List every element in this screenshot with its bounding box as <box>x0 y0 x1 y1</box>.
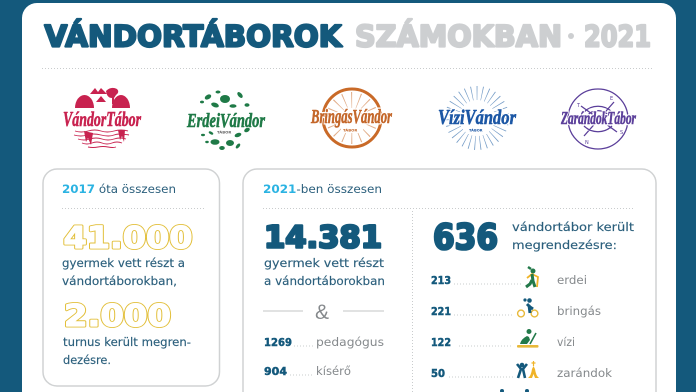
row: bike: bringás <box>557 304 601 318</box>
row: escorts: 904 <box>264 366 287 378</box>
row: bike: 221 <box>431 306 451 318</box>
icon: cyclist <box>518 298 538 317</box>
row: teachers <box>264 335 384 349</box>
logo: ZarándokTábor: ZarándokTábor <box>560 108 637 128</box>
row: pilgrim: zarándok <box>557 366 612 380</box>
text: children 2021: gyermek vett részt <box>264 256 385 270</box>
big number 14.381: 14.381 <box>264 220 382 256</box>
text: turns: turnus került megren- <box>63 335 191 349</box>
reeds <box>84 130 125 145</box>
icon: pilgrim and church <box>517 361 539 378</box>
row: teachers: 1269 <box>264 337 292 349</box>
logo: ZarándokTábor: S <box>620 130 623 136</box>
panel: 2021 total: megrendezésre: <box>512 238 617 252</box>
text: camps held: vándortábor került <box>512 220 635 234</box>
waves <box>74 130 129 148</box>
tree <box>106 88 118 104</box>
row: water <box>431 329 575 349</box>
logo: ErdeiVándor: TÁBOR <box>217 130 231 134</box>
row: forest: erdei <box>557 273 587 287</box>
row: pilgrim <box>431 361 612 380</box>
icon: hiker <box>526 267 538 287</box>
mountains <box>90 88 107 102</box>
panel: 2021 total <box>243 169 656 392</box>
panel heading 2017: 2017 óta összesen <box>62 182 176 196</box>
row: water: vízi <box>557 335 575 349</box>
ampersand divider <box>263 301 384 324</box>
row: escorts <box>264 364 351 378</box>
logo: ErdeiVándor <box>186 90 265 150</box>
partial next row icons <box>500 389 529 392</box>
logo: VíziVándor <box>438 93 517 143</box>
row: teachers: pedagógus <box>316 335 384 349</box>
left tent <box>75 95 94 108</box>
ampersand divider: & <box>315 301 329 324</box>
right tent <box>112 95 130 108</box>
logo: BringásVándor: TÁBOR <box>343 128 357 132</box>
panel: since 2017 <box>43 169 220 386</box>
title: 2021 <box>584 20 651 54</box>
title <box>44 20 651 54</box>
title: VÁNDORTÁBOROK <box>44 20 343 54</box>
logo: BringásVándor <box>310 89 392 147</box>
row: forest: 213 <box>431 275 451 287</box>
row: escorts: kísérő <box>316 364 351 378</box>
row: pilgrim: 50 <box>431 368 445 380</box>
panel: since 2017: dezésre. <box>63 353 111 367</box>
panel: since 2017: vándortáborokban, <box>62 274 177 288</box>
title: SZÁMOKBAN <box>355 20 562 54</box>
row: bike <box>431 298 601 318</box>
logo: VándorTábor: VándorTábor <box>63 107 142 131</box>
icon: rower <box>517 329 538 348</box>
logo: VándorTábor <box>63 88 142 148</box>
logo: ZarándokTábor <box>560 89 637 149</box>
logo: ZarándokTábor: N <box>585 140 589 146</box>
logo: ZarándokTábor: ZarándokTábor <box>560 108 637 128</box>
logos row <box>63 88 637 150</box>
logo: VíziVándor: VíziVándor <box>438 105 517 129</box>
row: water: 122 <box>431 337 451 349</box>
big number 2.000: 2.000 <box>64 299 171 334</box>
logo: VíziVándor: TÁBOR <box>469 128 483 132</box>
logo: BringásVándor: BringásVándor <box>310 106 392 128</box>
big number 41.000: 41.000 <box>64 221 192 256</box>
panel: 2021 total: a vándortáborokban <box>264 274 385 288</box>
logo: ZarándokTábor: E <box>610 96 613 102</box>
logo: BringásVándor: BringásVándor <box>310 106 392 128</box>
logo: VíziVándor: VíziVándor <box>438 105 517 129</box>
panel heading 2021: 2021-ben összesen <box>263 182 382 196</box>
logo: ErdeiVándor: ErdeiVándor <box>186 110 265 132</box>
big number 2.000: 2.000 <box>64 299 171 334</box>
logo: ZarándokTábor: T <box>576 103 581 109</box>
big number 41.000: 41.000 <box>64 221 192 256</box>
row: forest <box>431 267 587 287</box>
text: children: gyermek vett részt a <box>62 256 185 270</box>
big number 636: 636 <box>433 218 498 258</box>
